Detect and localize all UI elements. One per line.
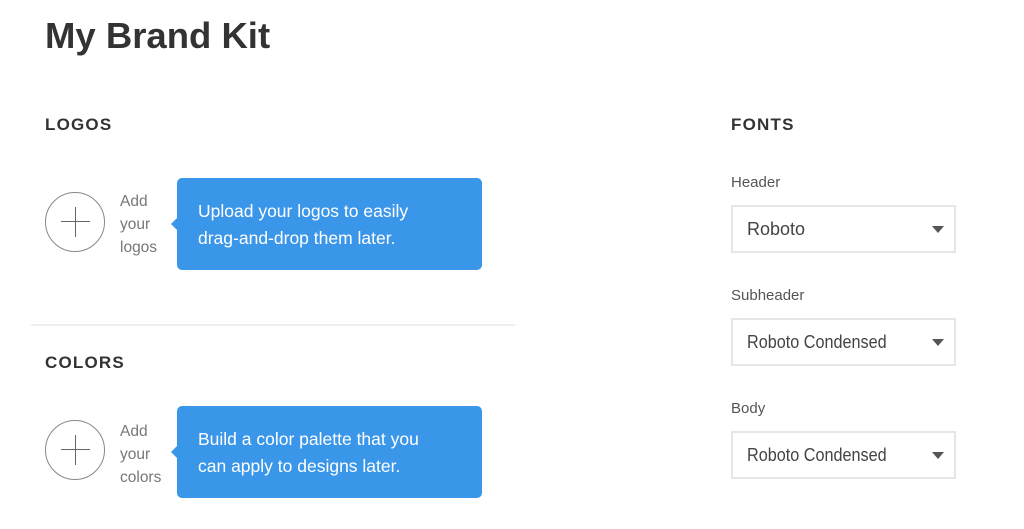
dropdown: header: Roboto xyxy=(747,219,805,239)
icon: add color xyxy=(45,420,105,480)
text: add your logos: Add xyxy=(120,193,148,210)
dropdown: subheader: Roboto Condensed xyxy=(747,332,887,352)
label: body: Body xyxy=(731,400,765,417)
callout: logos xyxy=(177,178,482,270)
label: header: Header xyxy=(731,174,780,191)
dropdown: body: Roboto Condensed xyxy=(747,445,887,465)
callout: colors xyxy=(177,406,482,498)
title: My Brand Kit xyxy=(45,15,270,56)
text: add your colors: colors xyxy=(120,469,161,486)
heading: fonts: FONTS xyxy=(731,115,795,134)
callout: colors: Build a color palette that you xyxy=(198,429,419,449)
callout: logos: Upload your logos to easily xyxy=(198,201,408,221)
text: add your colors: Add xyxy=(120,423,148,440)
callout: logos: drag-and-drop them later. xyxy=(198,228,395,248)
icon: add logo xyxy=(45,192,105,252)
text: add your logos xyxy=(120,193,157,256)
dropdown: body xyxy=(731,431,956,479)
heading: colors: COLORS xyxy=(45,353,125,372)
label: subheader: Subheader xyxy=(731,287,804,304)
panel: colors xyxy=(45,406,482,498)
text: add your logos: your xyxy=(120,216,150,233)
heading: logos: LOGOS xyxy=(45,115,112,134)
text: add your colors xyxy=(120,423,161,486)
dropdown: header xyxy=(731,205,956,253)
text: add your logos: logos xyxy=(120,239,157,256)
panel: logos upload xyxy=(45,178,482,270)
callout: colors: can apply to designs later. xyxy=(198,456,400,476)
text: add your colors: your xyxy=(120,446,150,463)
dropdown: subheader xyxy=(731,318,956,366)
